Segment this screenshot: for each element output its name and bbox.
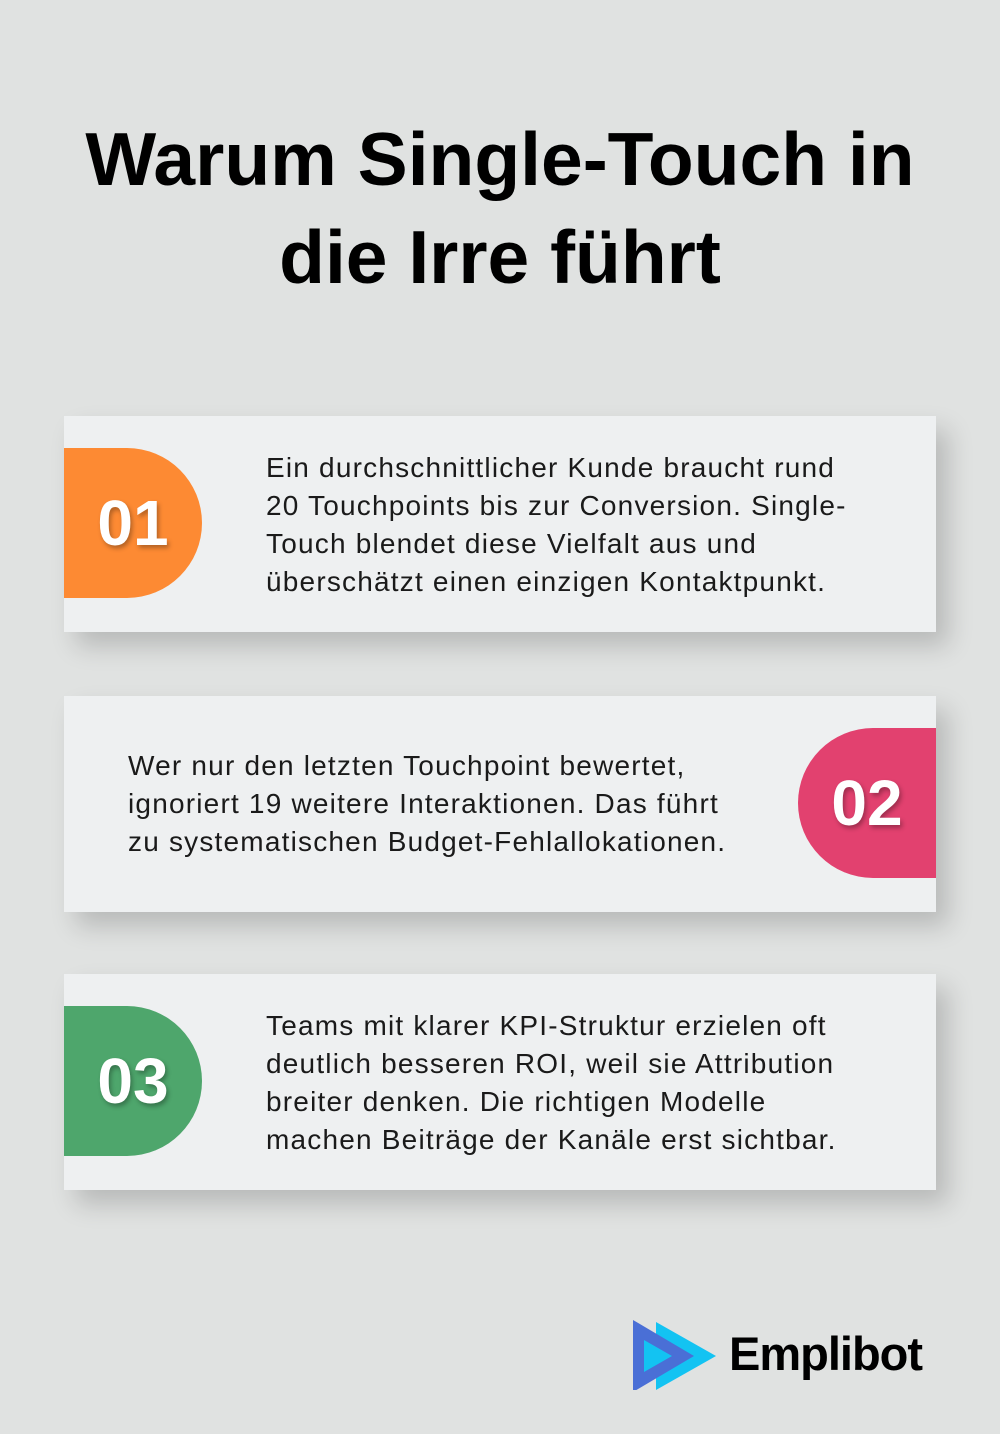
badge 03 (64, 1006, 202, 1156)
title (85, 117, 915, 299)
text 02: zu systematischen Budget-Fehlallokationen. (128, 826, 726, 857)
badge 03: 03 (97, 1045, 169, 1117)
badge 02 (798, 728, 936, 878)
text 02 (128, 750, 726, 857)
text 03: machen Beiträge der Kanäle erst sichtbar. (266, 1124, 837, 1155)
text 03 (266, 1010, 837, 1155)
text 01: Touch blendet diese Vielfalt aus und (266, 528, 757, 559)
text 03: breiter denken. Die richtigen Modelle (266, 1086, 766, 1117)
title: Warum Single-Touch in (85, 117, 915, 201)
icon: play arrows (633, 1320, 716, 1390)
panel: card 02 (64, 696, 936, 912)
title: die Irre führt (279, 215, 721, 299)
badge 02: 02 (831, 767, 903, 839)
text 03: Teams mit klarer KPI-Struktur erzielen oft (266, 1010, 827, 1041)
text 01: Ein durchschnittlicher Kunde braucht rund (266, 452, 835, 483)
logo text: Emplibot (729, 1327, 922, 1380)
text 01: überschätzt einen einzigen Kontaktpunkt. (266, 566, 826, 597)
badge 01: 01 (97, 487, 169, 559)
text 02: ignoriert 19 weitere Interaktionen. Das führt (128, 788, 719, 819)
text 01: 20 Touchpoints bis zur Conversion. Single- (266, 490, 847, 521)
logo (633, 1320, 922, 1390)
badge 01 (64, 448, 202, 598)
text 03: deutlich besseren ROI, weil sie Attribution (266, 1048, 834, 1079)
text 02: Wer nur den letzten Touchpoint bewertet, (128, 750, 686, 781)
text 01 (266, 452, 847, 597)
panel: card 03 (64, 974, 936, 1190)
panel: card 01 (64, 416, 936, 632)
